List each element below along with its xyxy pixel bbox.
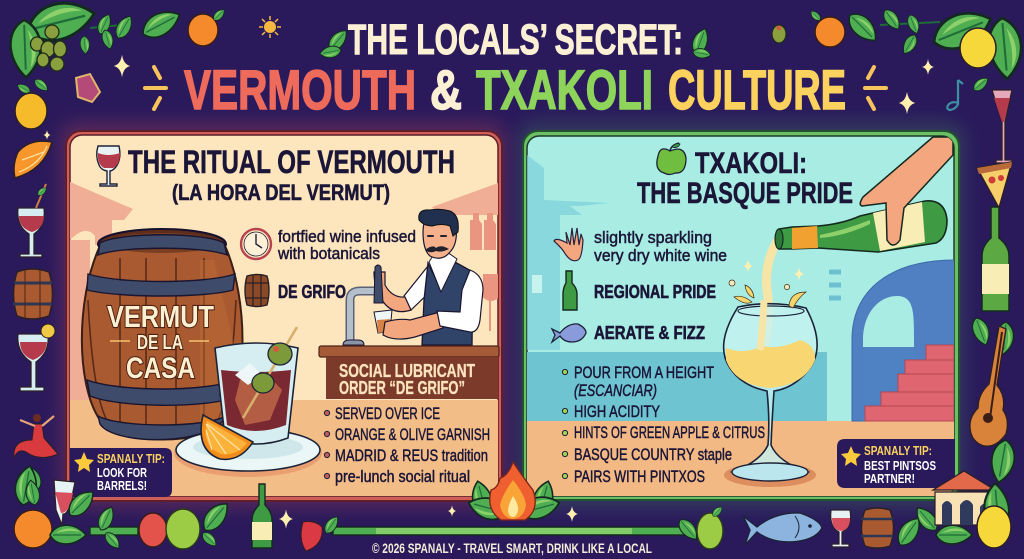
wine stream (765, 240, 778, 345)
barrel label: VERMUT (107, 299, 214, 334)
tap handle (374, 265, 383, 303)
background: wall decoration (829, 272, 841, 298)
fact text: AERATE & FIZZ (594, 323, 705, 343)
heading: ritual of vermouth (97, 144, 455, 205)
icon: fish (552, 324, 586, 342)
list: txakoli facts: POUR FROM A HEIGHT (574, 363, 714, 382)
right sleeve (437, 270, 483, 332)
olives on a pick (243, 327, 297, 418)
icon: green bottle (252, 484, 272, 548)
title line two: TXAKOLI (476, 58, 653, 121)
border: top right foliage and fruit (772, 4, 1024, 114)
list: vermouth facts: MADRID & REUS tradition (335, 446, 488, 465)
fact text: slightly sparkling (594, 228, 712, 247)
barrel label: CASA (126, 352, 195, 385)
icon: lime (697, 505, 724, 549)
list: txakoli facts: PAIRS WITH PINTXOS (574, 467, 705, 486)
list: vermouth facts: SERVED OVER ICE (335, 404, 440, 423)
icon: olive (772, 25, 786, 43)
bar counter (319, 346, 499, 399)
border: bottom right items (675, 471, 1011, 550)
heading text: TXAKOLI: (695, 147, 807, 180)
list: txakoli facts: HINTS OF GREEN APPLE & CITRUS (574, 423, 765, 442)
bartender (343, 209, 483, 345)
callout: spanaly tip barrels: SPANALY TIP: (97, 451, 165, 466)
panel: txakoli (523, 131, 959, 500)
panel: ritual of vermouth (66, 131, 502, 501)
barrel: vermut de la casa (82, 229, 242, 440)
vest (422, 262, 473, 345)
callout: spanaly tip barrels: BARRELS! (97, 478, 147, 493)
icon: hand (554, 228, 583, 261)
list: txakoli facts: BASQUE COUNTRY staple (574, 445, 732, 464)
icon: orange (14, 510, 52, 548)
background: water band (527, 352, 827, 422)
counter text: SOCIAL LUBRICANT (339, 361, 475, 381)
icon: green bottle (563, 271, 577, 310)
lower forearm (383, 312, 443, 339)
text: with botanicals (277, 244, 380, 263)
icon: lemon (960, 28, 996, 68)
bottle (779, 201, 947, 252)
background: blue arch (852, 260, 955, 421)
icon: title leaf right (689, 26, 712, 60)
callout: spanaly tip barrels (70, 448, 172, 497)
icon: fish (743, 513, 822, 545)
wine glass with txakoli (724, 260, 817, 487)
icon: orange (188, 7, 227, 46)
raised forearm (374, 272, 411, 312)
icon: wine glass (54, 480, 75, 525)
barrel label (107, 299, 214, 385)
icon: wine glass (97, 146, 120, 186)
icon: olives (30, 25, 66, 71)
head (423, 212, 456, 258)
raised sleeve (404, 266, 437, 310)
splash (729, 280, 806, 308)
bar taps (350, 291, 384, 343)
heading: txakoli (637, 143, 853, 210)
title line two: & (430, 58, 462, 121)
barrel hoops (87, 235, 236, 440)
fact text: REGIONAL PRIDE (594, 282, 716, 302)
title line one: THE LOCALS’ SECRET: (348, 16, 683, 64)
fact: regional pride (563, 271, 716, 310)
icon: cocktail wine glass (18, 184, 48, 257)
drink: vermouth glass on plate (174, 327, 322, 477)
fact: fortified wine (241, 227, 416, 259)
list: vermouth facts: pre-lunch social ritual (335, 467, 470, 486)
title line two: VERMOUTH (184, 58, 416, 121)
icon: music note (947, 80, 963, 110)
barrel label: DE LA (137, 332, 183, 354)
fact: sparkling (554, 228, 712, 261)
icon: gem (76, 74, 100, 102)
background: right building and shelves (432, 183, 498, 215)
icon: wine glass (831, 510, 851, 547)
callout: spanaly tip pintxos: PARTNER! (864, 471, 915, 486)
bottom ribbon (90, 527, 693, 535)
icon: green apple (657, 143, 686, 174)
icon: lemon left (15, 77, 50, 129)
icon: barrel (13, 269, 52, 319)
list: txakoli facts: (ESCANCIAR) (574, 381, 657, 400)
icon: guitar (970, 326, 1007, 446)
icon: strawberry (301, 514, 341, 551)
icon: red glass with lime (18, 324, 55, 391)
small glass (374, 310, 392, 333)
icon: orange slice (14, 141, 52, 178)
title rays (145, 67, 886, 109)
callout: spanaly tip pintxos: BEST PINTSOS (864, 458, 936, 473)
border: bottom left fruit (12, 464, 341, 551)
title line two (184, 58, 846, 121)
border: left column (13, 130, 58, 502)
callout: spanaly tip pintxos (837, 439, 955, 488)
icon: pizza slice (977, 162, 1012, 208)
icon: apple (139, 513, 167, 547)
icon: dancer (14, 414, 58, 458)
icon: house (933, 471, 995, 525)
callout: spanaly tip barrels: LOOK FOR (97, 465, 147, 480)
icon: orange (809, 9, 845, 47)
icon: campfire (466, 462, 562, 523)
fact text: DE GRIFO (278, 282, 346, 302)
subheading: (LA HORA DEL VERMUT) (172, 180, 390, 205)
list: txakoli facts (562, 363, 765, 486)
icon: barrel (861, 508, 894, 548)
list: vermouth facts: ORANGE & OLIVE GARNISH (335, 425, 490, 444)
hand (860, 137, 953, 245)
fact: aerate and fizz (552, 323, 705, 343)
background: left arch building (70, 182, 133, 245)
orange slice (201, 415, 253, 459)
background: red stairs (865, 345, 954, 421)
hand pouring bottle (765, 137, 953, 345)
icon: title leaf left (319, 26, 351, 60)
icon: pink glass (992, 90, 1012, 163)
background: left building (527, 155, 610, 350)
heading: txakoli: THE BASQUE PRIDE (637, 177, 853, 210)
bar counter: ORDER “DE GRIFO” (339, 378, 465, 398)
background: floor (70, 400, 498, 496)
fact text: fortfied wine infused (278, 227, 416, 246)
list: txakoli facts: HIGH ACIDITY (574, 402, 660, 421)
icon: small barrel (245, 274, 269, 306)
border: top left foliage and fruit (10, 0, 281, 129)
callout: spanaly tip pintxos: SPANALY TIP: (864, 443, 932, 458)
heading text: THE RITUAL OF VERMOUTH (128, 144, 455, 180)
list: vermouth facts (324, 404, 490, 486)
background: floor (527, 421, 954, 496)
fact: de grifo (245, 274, 346, 306)
shirt collar (429, 252, 457, 292)
title line two: CULTURE (668, 58, 846, 121)
icon: lime (166, 509, 200, 549)
border: right column (969, 75, 1018, 485)
icon: star (74, 452, 94, 472)
icon: clock (241, 229, 271, 259)
title (145, 16, 886, 121)
footer copyright: © 2026 SPANALY - TRAVEL SMART, DRINK LIKE A LOCAL (372, 541, 652, 556)
text: very dry white wine (594, 246, 727, 265)
icon: sun (259, 16, 281, 38)
icon: green bottle (982, 207, 1009, 311)
icon: star (841, 446, 861, 466)
icon: lemon (977, 506, 1011, 548)
